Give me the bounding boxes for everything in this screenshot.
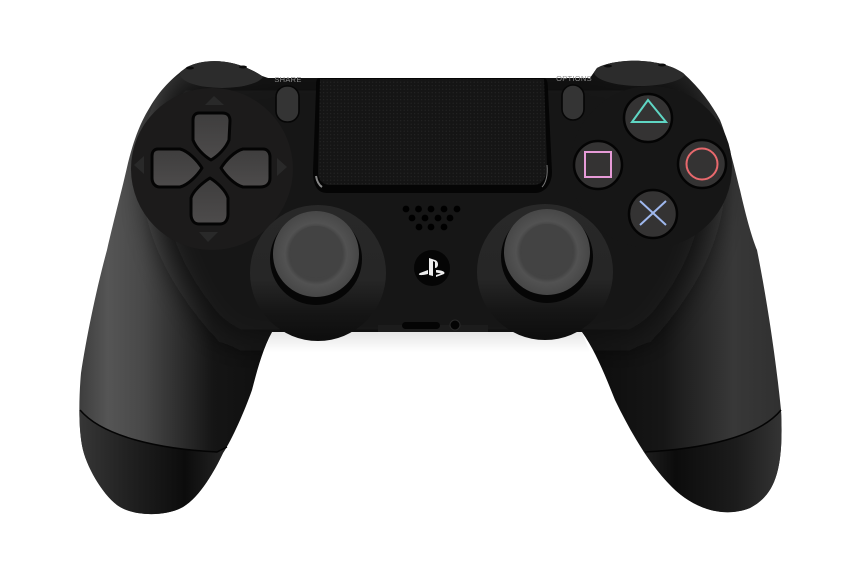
- d-pad well: [131, 88, 293, 250]
- share button: [276, 86, 299, 122]
- shoulder highlights: [180, 58, 686, 88]
- right grip seam: [645, 410, 781, 452]
- face button well: [570, 86, 732, 248]
- cross button: [629, 190, 677, 238]
- circle button: [678, 140, 726, 188]
- left grip seam: [80, 410, 227, 452]
- touchpad: [313, 78, 552, 193]
- left shoulder vents: [186, 66, 247, 70]
- right grip tip: [643, 412, 782, 512]
- PS button: [414, 250, 450, 286]
- d-pad buttons: [152, 113, 270, 224]
- d-pad direction arrows: [134, 96, 287, 242]
- triangle button: [624, 94, 672, 142]
- bottom ports: [378, 320, 488, 332]
- left grip tip: [79, 410, 226, 514]
- left analog stick: [250, 205, 386, 341]
- right shoulder vents: [604, 64, 666, 68]
- options label: OPTIONS: [556, 74, 592, 83]
- drop shadow under controller: [264, 332, 590, 352]
- controller body: [79, 61, 782, 514]
- soft central shading: [151, 80, 715, 340]
- options button: [562, 85, 584, 120]
- controller: [70, 58, 790, 520]
- share label: SHARE: [274, 75, 302, 84]
- right analog stick: [477, 204, 613, 340]
- speaker grille: [403, 206, 460, 230]
- square button: [574, 141, 622, 189]
